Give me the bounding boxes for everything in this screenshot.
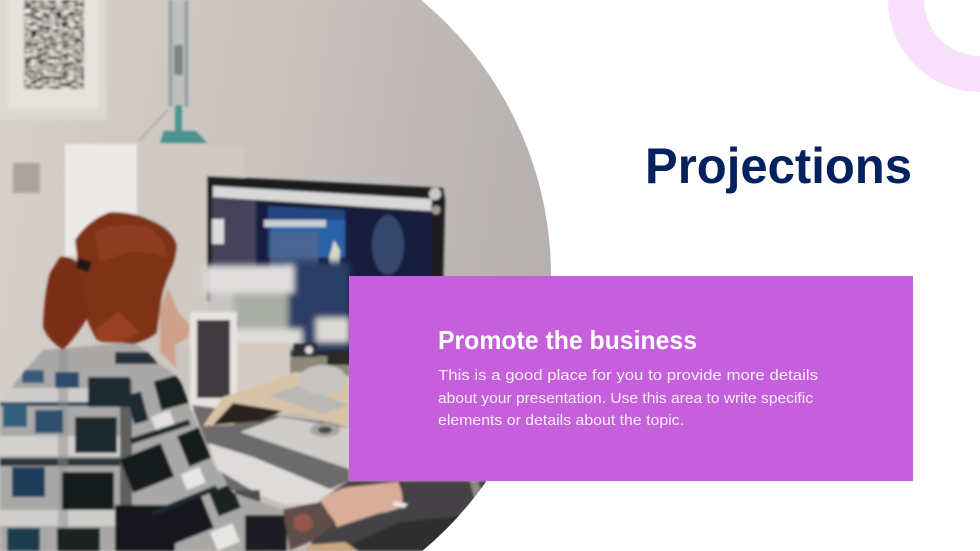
photo: woman working at a desktop computer — [0, 0, 560, 551]
laptop — [240, 417, 349, 469]
panel heading: Promote the business — [438, 325, 697, 355]
blurred reflections in front of the screen — [204, 262, 350, 352]
desktop monitor — [207, 176, 445, 370]
title: Projections — [645, 138, 912, 194]
panel body text: This is a good place for you to provide more details — [438, 367, 818, 384]
wooden monitor stand — [203, 372, 349, 428]
hand on mouse — [320, 482, 402, 527]
wall socket — [13, 163, 40, 193]
desk lamp — [140, 0, 207, 143]
white cabinet — [65, 144, 245, 346]
desk surface — [192, 365, 349, 500]
framed picture on wall — [0, 0, 107, 120]
light and dark horizontal bands — [0, 350, 134, 528]
shirt body checks — [22, 370, 44, 383]
panel: promote the business — [349, 276, 913, 481]
panel body text: about your presentation. Use this area to write specific — [438, 390, 814, 407]
forearm and hand at chin — [160, 287, 190, 368]
tablet on stand — [190, 312, 290, 410]
keyboard — [208, 443, 349, 505]
tattooed arm — [282, 502, 336, 551]
mouse mat — [310, 481, 490, 551]
red hair — [43, 212, 177, 350]
panel body text — [438, 367, 818, 429]
panel body text: elements or details about the topic. — [438, 412, 684, 429]
decorative ring top right — [888, 0, 980, 92]
plaid shirt — [0, 340, 300, 551]
camera and headphones behind panel — [290, 343, 351, 376]
shirt sleeve checks — [120, 374, 287, 551]
